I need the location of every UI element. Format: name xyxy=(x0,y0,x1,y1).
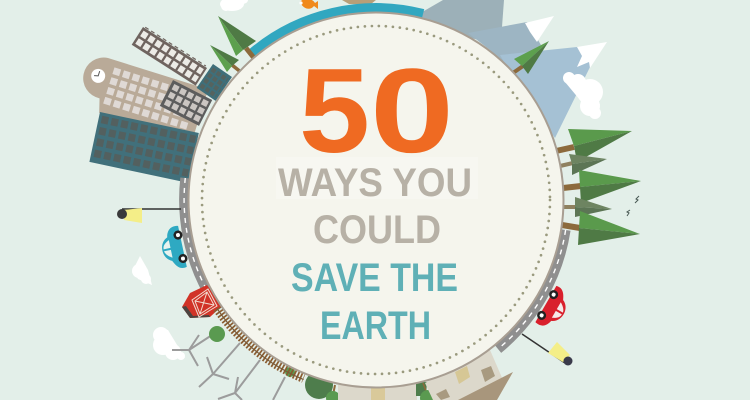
windmill 1 xyxy=(172,335,212,366)
icon: boat xyxy=(342,0,376,4)
icon: red car xyxy=(533,284,574,333)
windmill 3 xyxy=(218,360,260,400)
road: left xyxy=(184,178,209,294)
title: earth: EARTH xyxy=(320,304,431,348)
building: bottom house right xyxy=(425,350,513,400)
tree: bottom xyxy=(416,382,436,400)
mountains xyxy=(417,0,607,138)
building: bottom house left xyxy=(338,383,417,400)
windmill 4 mast xyxy=(273,377,285,400)
railway tracks xyxy=(217,309,304,380)
tree 5 xyxy=(562,211,640,245)
icon: birds xyxy=(627,196,639,216)
text backing xyxy=(276,157,478,199)
street lamp right xyxy=(522,334,572,366)
icon: blue car xyxy=(158,225,189,272)
tree: top left large xyxy=(218,16,256,58)
building: grey xyxy=(160,80,212,126)
barn xyxy=(182,285,222,318)
tree 3 xyxy=(563,170,641,203)
icon: cloud left xyxy=(132,256,152,285)
bushes xyxy=(209,326,340,400)
icon: fish xyxy=(299,0,318,9)
tree 4 xyxy=(563,197,612,217)
title: 50: 0 xyxy=(370,44,454,178)
title: could: COULD xyxy=(313,208,441,252)
title: ways you: WAYS YOU xyxy=(278,161,472,205)
icon: cloud top left xyxy=(220,0,248,11)
building: beige clock tower xyxy=(74,52,208,142)
river xyxy=(252,8,423,53)
title: 50 xyxy=(299,44,454,178)
windmill 2 xyxy=(199,343,240,387)
building: small teal xyxy=(197,64,232,101)
road: right xyxy=(498,230,566,349)
main circle xyxy=(188,12,564,388)
title: 50: 5 xyxy=(299,44,370,178)
building: brown office xyxy=(132,26,208,86)
tree: top left small xyxy=(210,45,242,73)
title: save the: SAVE THE xyxy=(291,256,458,300)
icon: cloud lower left xyxy=(153,327,185,360)
tree 2 xyxy=(560,154,607,175)
tree 1 xyxy=(556,129,632,162)
building: dark teal xyxy=(89,112,199,183)
icon: cloud over mountain xyxy=(563,72,603,119)
tree: upper right xyxy=(513,41,549,74)
street lamp left xyxy=(117,208,181,223)
trees: right side xyxy=(556,129,641,245)
